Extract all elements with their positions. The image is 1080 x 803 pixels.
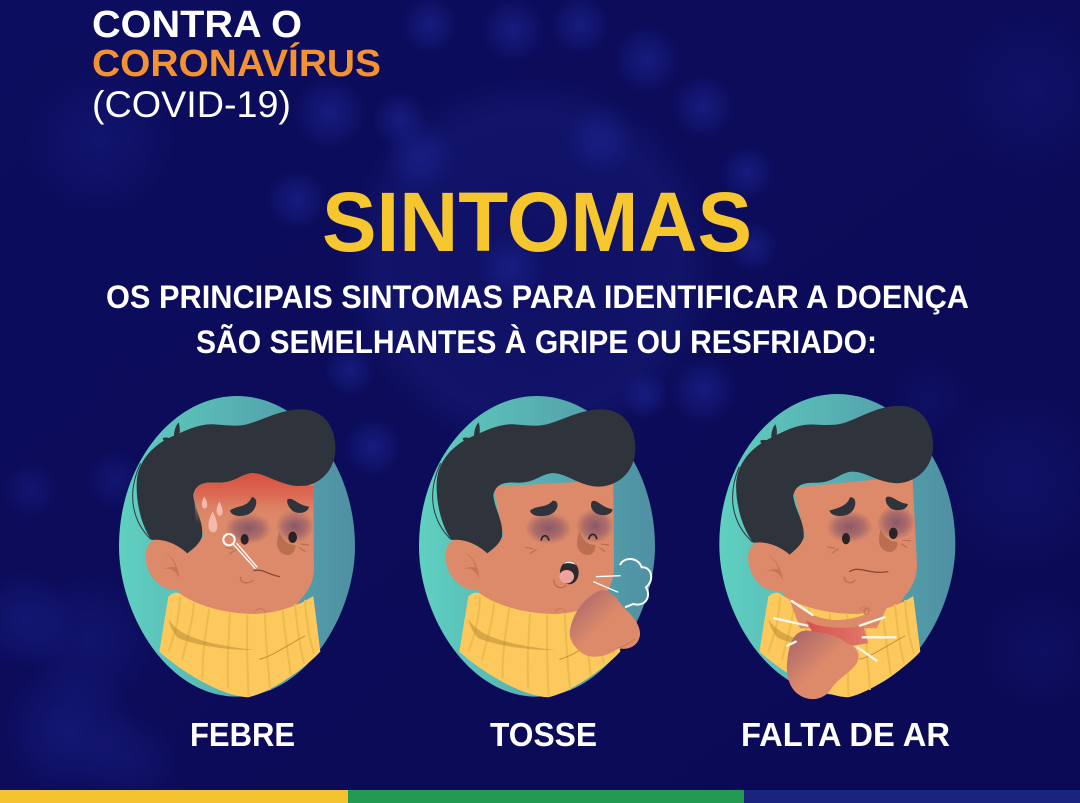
icon: man short of breath [719, 394, 955, 699]
icon: man with fever [119, 396, 355, 697]
heading line: contra o: CONTRA O [92, 4, 302, 46]
subtitle text: OS PRINCIPAIS SINTOMAS PARA IDENTIFICAR A DOENÇA [106, 279, 969, 315]
title: sintomas: SINTOMAS [322, 175, 752, 269]
icon: man coughing [419, 396, 655, 697]
panel: falta de ar [719, 394, 955, 753]
label: febre: FEBRE [190, 716, 295, 753]
heading line: covid-19: (COVID-19) [92, 84, 291, 125]
panel: tosse [419, 396, 655, 753]
header: contra o coronavírus (covid-19) [92, 4, 381, 125]
heading line: coronavírus: CORONAVÍRUS [92, 41, 381, 85]
subtitle text [106, 279, 969, 360]
background virus silhouette [267, 0, 810, 477]
footer color stripe [0, 790, 1080, 803]
subtitle text: SÃO SEMELHANTES À GRIPE OU RESFRIADO: [196, 324, 877, 360]
panel: febre [119, 396, 355, 753]
label: falta de ar: FALTA DE AR [741, 716, 950, 753]
label: tosse: TOSSE [490, 716, 597, 753]
